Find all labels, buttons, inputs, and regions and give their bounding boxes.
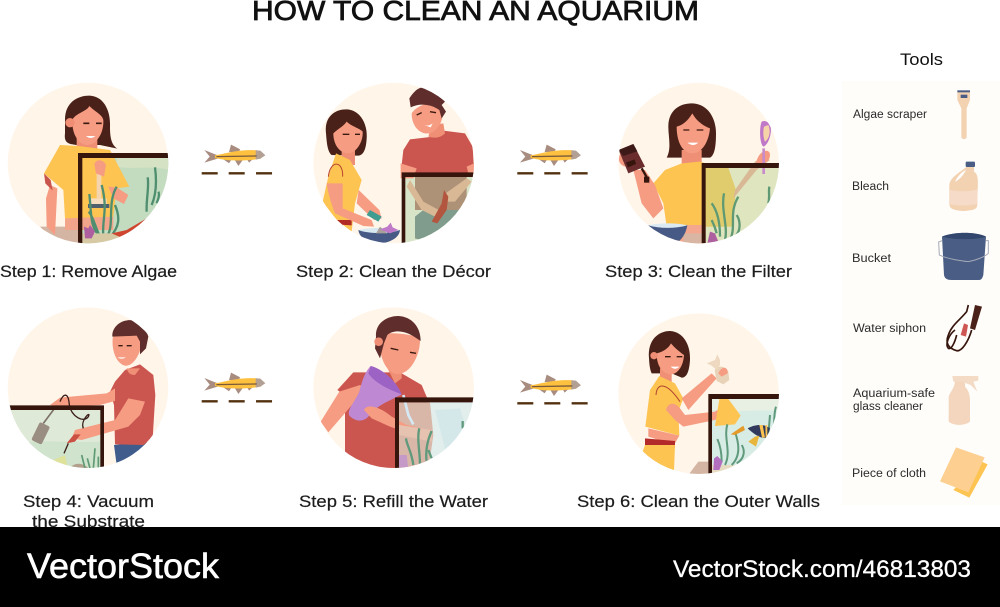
step 2 label: Step 2: Clean the Décor bbox=[296, 262, 491, 281]
tool: piece of cloth: Piece of cloth bbox=[852, 468, 926, 480]
panel: step 1 illustration bbox=[8, 83, 172, 245]
step 1 label: Step 1: Remove Algae bbox=[0, 262, 177, 281]
step 5 label: Step 5: Refill the Water bbox=[299, 492, 488, 511]
panel: step 3 illustration bbox=[618, 83, 782, 245]
panel: step 6 illustration bbox=[618, 313, 782, 476]
tool: water siphon: Water siphon bbox=[853, 323, 926, 335]
step 6 label: Step 6: Clean the Outer Walls bbox=[577, 492, 820, 511]
tool: bucket: Bucket bbox=[852, 253, 892, 265]
tool: water siphon bbox=[853, 305, 982, 351]
step 3 label: Step 3: Clean the Filter bbox=[605, 262, 792, 281]
tool: algae scraper bbox=[853, 90, 970, 139]
panel: step 2 illustration bbox=[313, 83, 475, 245]
tool: bucket bbox=[852, 233, 988, 280]
tool: aquarium-safe glass cleaner: Aquarium-safe bbox=[853, 388, 935, 400]
fish divider 4 bbox=[517, 375, 588, 403]
fish divider 1 bbox=[202, 145, 272, 173]
panel: step 5 illustration bbox=[313, 307, 476, 471]
panel: tools bbox=[842, 81, 1000, 505]
tool: bleach bbox=[852, 162, 978, 211]
step 4 label bbox=[23, 492, 154, 531]
fish divider 3 bbox=[202, 373, 272, 401]
tools heading: Tools bbox=[900, 50, 943, 69]
tool: piece of cloth bbox=[852, 447, 988, 498]
tool: bleach: Bleach bbox=[852, 181, 889, 193]
footer logo: VectorStock bbox=[27, 547, 220, 586]
footer url: VectorStock.com/46813803 bbox=[673, 556, 971, 583]
step 4 label: the Substrate bbox=[32, 512, 145, 531]
tool: aquarium-safe glass cleaner bbox=[853, 376, 978, 425]
panel: step 4 illustration bbox=[7, 307, 168, 470]
fish divider 2 bbox=[517, 145, 588, 173]
step 4 label: Step 4: Vacuum bbox=[23, 492, 154, 511]
footer band bbox=[0, 527, 1000, 607]
tool: algae scraper: Algae scraper bbox=[853, 109, 927, 121]
tool: aquarium-safe glass cleaner: glass cleaner bbox=[853, 401, 923, 413]
